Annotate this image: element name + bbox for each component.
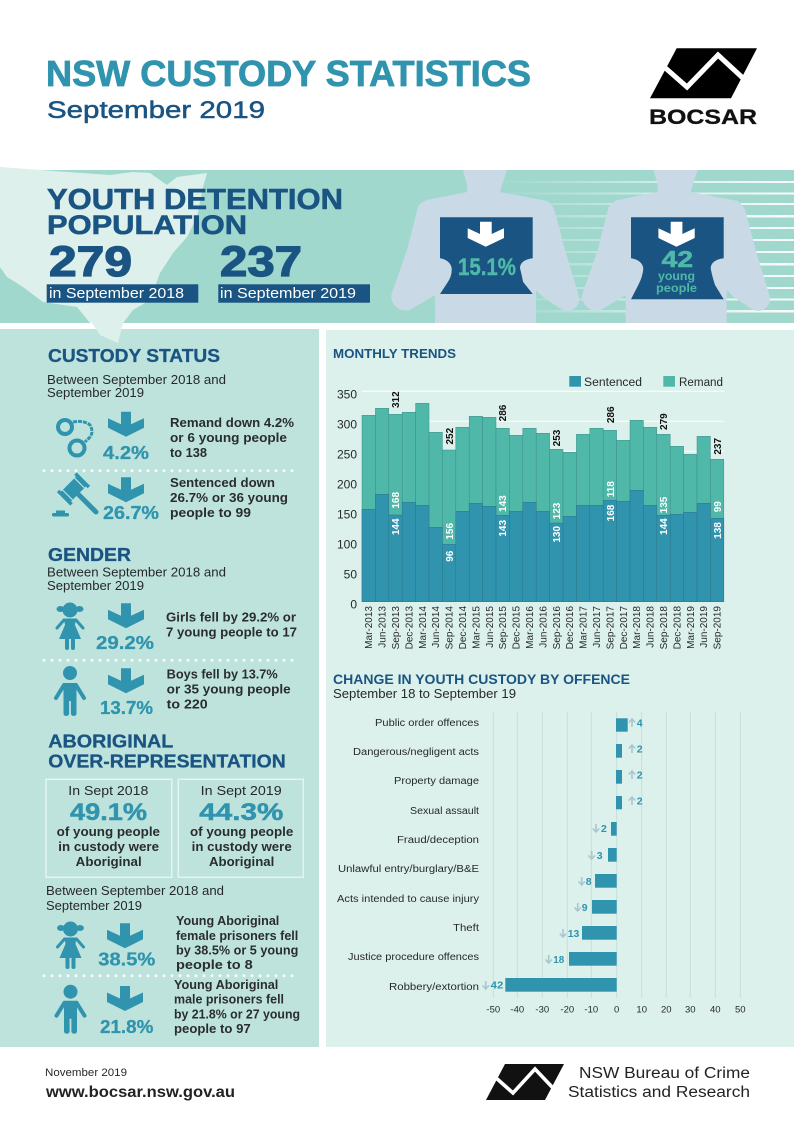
text: remand summary: Remand down 4.2% xyxy=(170,416,294,430)
y axis labels: 250 xyxy=(337,448,357,462)
data labels: 253 xyxy=(552,429,563,446)
x axis ticks: -20 xyxy=(560,1005,574,1016)
figure: person holding 42 young people sign: young xyxy=(658,271,695,283)
icon: girl xyxy=(56,602,84,650)
text: remand summary xyxy=(170,416,294,460)
stat: remand percent: 4.2% xyxy=(103,442,149,463)
x axis labels: Sep-2018 xyxy=(659,606,670,649)
heading: youth detention population xyxy=(47,184,343,240)
heading: change in youth custody by offence: CHANGE IN YOUTH CUSTODY BY OFFENCE xyxy=(333,671,630,687)
text: sentenced summary xyxy=(170,476,288,520)
x axis ticks: -40 xyxy=(510,1005,524,1016)
footer: date and website: November 2019 xyxy=(45,1067,127,1079)
text: sentenced summary: Sentenced down xyxy=(170,476,275,490)
x axis ticks: 20 xyxy=(661,1005,672,1016)
stat: girls percent: 29.2% xyxy=(96,632,154,653)
y axis labels: 150 xyxy=(337,508,357,522)
data labels: 168 xyxy=(391,492,402,509)
x axis labels: Jun-2015 xyxy=(485,606,496,648)
data labels: 118 xyxy=(606,481,617,497)
change values: 42 xyxy=(491,980,503,992)
heading: youth detention population: YOUTH DETENTION xyxy=(47,184,343,216)
text: Aboriginal female summary: female prisoners fell xyxy=(176,929,298,943)
x axis ticks: 40 xyxy=(710,1005,721,1016)
stat: boys percent: 13.7% xyxy=(100,697,153,718)
stacked bar chart: monthly trends xyxy=(337,388,724,649)
footer: NSW Bureau of Crime logo xyxy=(486,1064,750,1101)
offence category labels: Robbery/extortion xyxy=(389,982,479,993)
change values: 18 xyxy=(553,954,564,966)
x axis labels: Jun-2014 xyxy=(431,606,442,648)
card: Sept 2018: of young people xyxy=(57,825,160,839)
remand bars xyxy=(362,403,724,602)
data labels: 123 xyxy=(552,502,563,519)
icon: Aboriginal boy xyxy=(56,985,84,1034)
stat: 237 in September 2019: in September 2019 xyxy=(220,286,356,302)
text: custody status period xyxy=(47,372,226,400)
x axis labels: Mar-2014 xyxy=(418,606,429,649)
data labels: 143 xyxy=(498,520,509,537)
change values xyxy=(491,718,643,992)
data labels: 144 xyxy=(391,518,402,535)
heading: custody status: CUSTODY STATUS xyxy=(48,345,220,366)
text: Aboriginal male summary: by 21.8% or 27 young xyxy=(174,1007,300,1021)
x axis ticks: 10 xyxy=(636,1005,647,1016)
x axis labels: Dec-2017 xyxy=(619,606,630,649)
text: gender period xyxy=(47,564,226,593)
data labels: 252 xyxy=(445,427,456,445)
panel: custody status, gender and Aboriginal over-representation xyxy=(0,329,319,1047)
text: Aboriginal period: September 2019 xyxy=(46,898,142,913)
text: girls summary: 7 young people to 17 xyxy=(166,626,297,640)
change values: 2 xyxy=(637,770,643,782)
text: boys summary: to 220 xyxy=(167,697,208,711)
stat: Aboriginal male percent: 21.8% xyxy=(100,1016,153,1037)
x axis labels: Dec-2018 xyxy=(672,606,683,649)
text: Aboriginal period: Between September 2018 and xyxy=(46,883,224,898)
icon: arrow down boys xyxy=(108,668,144,693)
x axis labels: Jun-2017 xyxy=(592,606,603,648)
card: Sept 2019 xyxy=(178,779,303,877)
card: Sept 2018: In Sept 2018 xyxy=(68,783,148,798)
x axis ticks: 0 xyxy=(614,1005,619,1016)
icon: arrow down Aboriginal male xyxy=(107,986,143,1011)
heading: change in youth custody by offence xyxy=(333,671,630,701)
card: Sept 2019: of young people xyxy=(190,825,293,839)
x axis labels: Mar-2016 xyxy=(525,606,536,649)
x axis ticks xyxy=(486,1005,746,1016)
x axis labels: Dec-2015 xyxy=(512,606,523,649)
data labels: 144 xyxy=(659,518,670,535)
panel: right column charts xyxy=(326,330,794,1047)
footer: date and website: www.bocsar.nsw.gov.au xyxy=(45,1084,235,1101)
x axis labels xyxy=(364,606,724,649)
card: Sept 2018: 49.1% xyxy=(70,799,147,826)
data labels xyxy=(391,391,724,562)
stat: Aboriginal female percent: 38.5% xyxy=(98,949,155,970)
chart legend: Sentenced xyxy=(584,377,642,389)
logo: BOCSAR xyxy=(649,48,758,129)
offence category labels: Sexual assault xyxy=(410,806,479,817)
change values: 2 xyxy=(637,796,643,808)
text: custody status period: September 2019 xyxy=(47,385,144,400)
icon: arrow down remand xyxy=(108,412,144,437)
data labels: 312 xyxy=(391,391,402,408)
footer: NSW Bureau of Crime logo: NSW Bureau of Crime xyxy=(579,1065,750,1082)
text: gender period: Between September 2018 and xyxy=(47,564,226,580)
data labels: 279 xyxy=(659,413,670,430)
change values: 3 xyxy=(597,850,603,862)
chart legend: Remand xyxy=(679,377,723,389)
text: Aboriginal male summary: male prisoners fell xyxy=(174,993,284,1007)
text: gender period: September 2019 xyxy=(47,578,144,593)
x axis labels: Sep-2014 xyxy=(445,606,456,649)
stat: 237 in September 2019: 237 xyxy=(220,238,302,286)
text: Aboriginal period xyxy=(46,883,224,913)
data labels: 130 xyxy=(552,526,563,543)
x axis ticks: 30 xyxy=(685,1005,696,1016)
heading: Aboriginal over-representation: OVER-REPRESENTATION xyxy=(48,751,286,772)
text: Aboriginal male summary: people to 97 xyxy=(174,1022,251,1036)
x axis labels: Dec-2013 xyxy=(404,606,415,649)
change values: 2 xyxy=(601,823,607,835)
x axis labels: Sep-2017 xyxy=(605,606,616,649)
change values: 8 xyxy=(586,876,592,888)
heading: change in youth custody by offence: September 18 to September 19 xyxy=(333,687,516,701)
offence category labels: Dangerous/negligent acts xyxy=(353,747,479,758)
figure: person holding 42 young people sign: people xyxy=(656,283,697,295)
text: remand summary: to 138 xyxy=(170,446,207,460)
bar chart: change by offence xyxy=(337,712,746,1016)
x axis labels: Mar-2013 xyxy=(364,606,375,649)
figure: person holding 15.1% sign xyxy=(391,170,579,323)
x axis labels: Sep-2016 xyxy=(552,606,563,649)
figure: person holding 42 young people sign: 42 xyxy=(662,246,693,272)
data labels: 156 xyxy=(445,523,456,540)
stat: sentenced percent: 26.7% xyxy=(103,502,159,523)
stat: 279 in September 2018 xyxy=(47,238,198,303)
change values: 9 xyxy=(582,902,588,914)
offence category labels: Unlawful entry/burglary/B&E xyxy=(338,864,479,875)
y axis labels: 100 xyxy=(337,538,357,552)
data labels: 286 xyxy=(498,404,509,421)
logo: BOCSAR: BOCSAR xyxy=(649,105,758,129)
footer: NSW Bureau of Crime logo: Statistics and Research xyxy=(568,1084,750,1101)
x axis labels: Mar-2018 xyxy=(632,606,643,649)
data labels: 99 xyxy=(713,501,724,512)
offence category labels: Fraud/deception xyxy=(397,835,479,846)
background stripes xyxy=(500,181,794,312)
x axis labels: Dec-2014 xyxy=(458,606,469,649)
card: Sept 2018: Aboriginal xyxy=(76,855,142,869)
offence category labels: Property damage xyxy=(394,776,479,787)
data labels: 286 xyxy=(606,406,617,423)
x axis labels: Jun-2019 xyxy=(699,606,710,648)
change values: 2 xyxy=(637,744,643,756)
card: Sept 2019: 44.3% xyxy=(199,799,284,826)
heading: Aboriginal over-representation xyxy=(48,731,286,772)
data labels: 168 xyxy=(606,504,617,521)
offence category labels: Justice procedure offences xyxy=(348,952,479,963)
change arrows xyxy=(482,719,635,989)
stat: 279 in September 2018: 279 xyxy=(49,238,132,286)
text: Aboriginal female summary: Young Aboriginal xyxy=(176,914,279,928)
figure: person holding 42 young people sign xyxy=(582,170,770,323)
stat: 279 in September 2018: in September 2018 xyxy=(49,286,184,302)
text: Aboriginal male summary xyxy=(174,978,300,1036)
sentenced bars xyxy=(362,490,724,602)
text: remand summary: or 6 young people xyxy=(170,431,287,445)
text: boys summary xyxy=(167,667,291,711)
x axis labels: Sep-2015 xyxy=(498,606,509,649)
y axis labels: 50 xyxy=(344,568,357,582)
x axis ticks: 50 xyxy=(735,1005,746,1016)
icon: boy xyxy=(56,666,84,716)
y axis labels: 0 xyxy=(350,598,357,612)
offence category labels xyxy=(337,718,479,993)
icon: Aboriginal girl xyxy=(57,922,84,969)
title: September 2019 xyxy=(47,97,265,124)
stat: 237 in September 2019 xyxy=(218,238,370,303)
x axis ticks: -30 xyxy=(535,1005,549,1016)
text: sentenced summary: people to 99 xyxy=(170,506,251,520)
x axis labels: Jun-2013 xyxy=(378,606,389,648)
text: Aboriginal female summary: people to 8 xyxy=(176,958,253,972)
text: custody status period: Between September 2018 and xyxy=(47,372,226,387)
text: sentenced summary: 26.7% or 36 young xyxy=(170,491,288,505)
x axis labels: Sep-2013 xyxy=(391,606,402,649)
data labels: 138 xyxy=(713,522,724,539)
text: boys summary: Boys fell by 13.7% xyxy=(167,667,278,681)
icon: arrow down Aboriginal female xyxy=(107,923,143,948)
text: Aboriginal male summary: Young Aboriginal xyxy=(174,978,278,992)
heading: youth detention population: POPULATION xyxy=(47,210,247,240)
offence category labels: Acts intended to cause injury xyxy=(337,894,479,905)
text: Aboriginal female summary xyxy=(176,914,298,972)
change values: 4 xyxy=(637,718,643,730)
title xyxy=(46,53,531,124)
title: NSW CUSTODY STATISTICS xyxy=(46,53,531,94)
card: Sept 2019: in custody were xyxy=(192,840,292,854)
heading: Aboriginal over-representation: ABORIGINAL xyxy=(48,731,173,752)
y axis labels: 350 xyxy=(337,388,357,402)
data labels: 143 xyxy=(498,495,509,512)
text: Aboriginal female summary: by 38.5% or 5 young xyxy=(176,944,298,958)
x axis labels: Mar-2019 xyxy=(686,606,697,649)
text: boys summary: or 35 young people xyxy=(167,682,291,696)
footer: date and website xyxy=(45,1067,235,1101)
card: Sept 2018 xyxy=(46,779,172,877)
icon: arrow down girls xyxy=(108,603,144,628)
x axis labels: Jun-2018 xyxy=(646,606,657,648)
x axis labels: Dec-2016 xyxy=(565,606,576,649)
x axis labels: Mar-2017 xyxy=(579,606,590,649)
x axis labels: Jun-2016 xyxy=(538,606,549,648)
change values: 13 xyxy=(568,928,579,940)
y axis labels: 300 xyxy=(337,418,357,432)
x axis ticks: -10 xyxy=(584,1005,598,1016)
y axis labels: 200 xyxy=(337,478,357,492)
offence category labels: Theft xyxy=(453,923,479,934)
heading: gender: GENDER xyxy=(48,544,131,565)
y axis labels xyxy=(337,388,357,612)
x axis labels: Sep-2019 xyxy=(713,606,724,649)
text: girls summary xyxy=(166,611,297,640)
card: Sept 2018: in custody were xyxy=(58,840,159,854)
data labels: 96 xyxy=(445,550,456,562)
x axis labels: Mar-2015 xyxy=(471,606,482,649)
offence bars xyxy=(505,718,628,992)
offence category labels: Public order offences xyxy=(375,718,479,729)
card: Sept 2019: Aboriginal xyxy=(209,855,274,869)
icon: arrow down sentenced xyxy=(108,477,144,502)
chart legend xyxy=(569,376,723,389)
figure: person holding 15.1% sign: 15.1% xyxy=(458,254,516,281)
data labels: 237 xyxy=(713,438,724,455)
map: NSW outline xyxy=(0,167,207,343)
card: Sept 2019: In Sept 2019 xyxy=(201,783,282,798)
panel: youth detention population banner xyxy=(0,167,794,343)
icon: handcuffs xyxy=(58,420,92,456)
data labels: 135 xyxy=(659,496,670,513)
heading: monthly trends: MONTHLY TRENDS xyxy=(333,347,456,361)
text: girls summary: Girls fell by 29.2% or xyxy=(166,611,296,625)
x axis ticks: -50 xyxy=(486,1005,500,1016)
icon: gavel xyxy=(52,472,96,516)
